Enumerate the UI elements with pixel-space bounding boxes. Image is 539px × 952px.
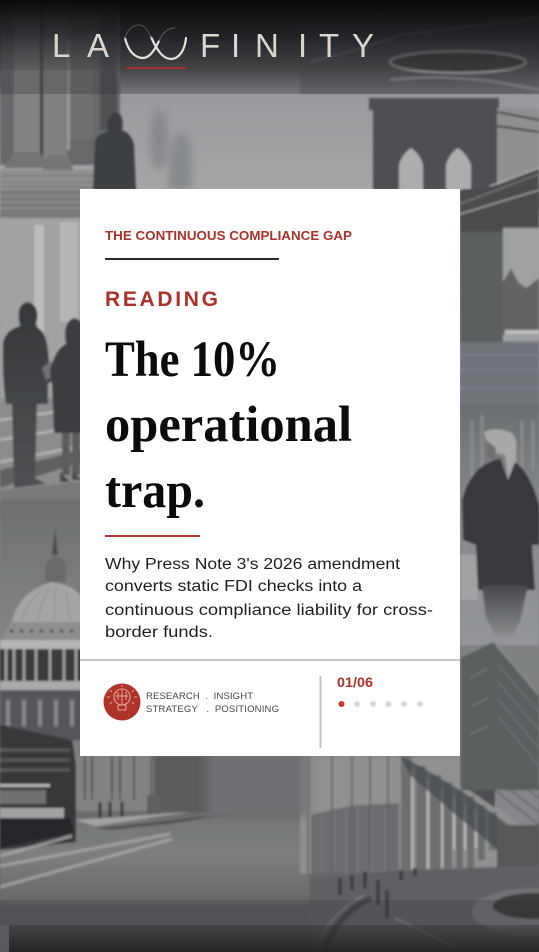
scene: barrister walking, right: [460, 405, 539, 645]
label: reading: READING: [105, 288, 218, 311]
scene: office tower, right: [461, 642, 539, 790]
page number: 01/06: [337, 675, 374, 690]
description text: converts static FDI checks into a: [105, 578, 362, 595]
description text: continuous compliance liability for cross-: [105, 602, 433, 619]
top shade: [0, 0, 539, 70]
description text: border funds.: [105, 624, 213, 641]
main title: operational: [105, 397, 352, 453]
footer vertical divider: [320, 676, 322, 748]
description text: Why Press Note 3's 2026 amendment: [105, 556, 401, 573]
logo wordmark: LAFINITY: [52, 27, 374, 64]
scene: cathedral dome, left: [0, 500, 82, 740]
scene: London street and bus, bottom left: [0, 725, 310, 905]
scene: United Nations plaza and flags, bottom right: [300, 756, 539, 952]
tagline text: [146, 691, 279, 715]
scene: businesspeople on steps, left: [0, 190, 85, 525]
brand logo: LAW-infinity-FINITY: [52, 25, 374, 69]
logo red underline: [126, 67, 186, 69]
kicker rule: [105, 258, 279, 260]
scene: bridge pier and waterfront, right: [460, 174, 539, 412]
icon: brain lightbulb badge: [104, 684, 140, 720]
scene: Brooklyn bridge tower, top right: [300, 10, 539, 210]
tagline text: STRATEGY . POSITIONING: [146, 704, 279, 715]
scene: colonnade with figure, top left: [0, 0, 192, 190]
description text: [105, 556, 433, 641]
main title: trap.: [105, 463, 205, 519]
pagination dots: [338, 701, 423, 707]
main title: The 10%: [105, 332, 280, 388]
title rule: [105, 535, 200, 537]
logo infinity mark: [125, 25, 186, 59]
main title: [105, 332, 352, 519]
footer divider: [80, 659, 460, 661]
scene: fade at road centre: [205, 752, 310, 817]
tagline text: RESEARCH . INSIGHT: [146, 691, 253, 702]
kicker heading: THE CONTINUOUS COMPLIANCE GAP: [105, 228, 352, 243]
bottom shade: [0, 900, 539, 925]
panel: central white card: [80, 189, 460, 756]
